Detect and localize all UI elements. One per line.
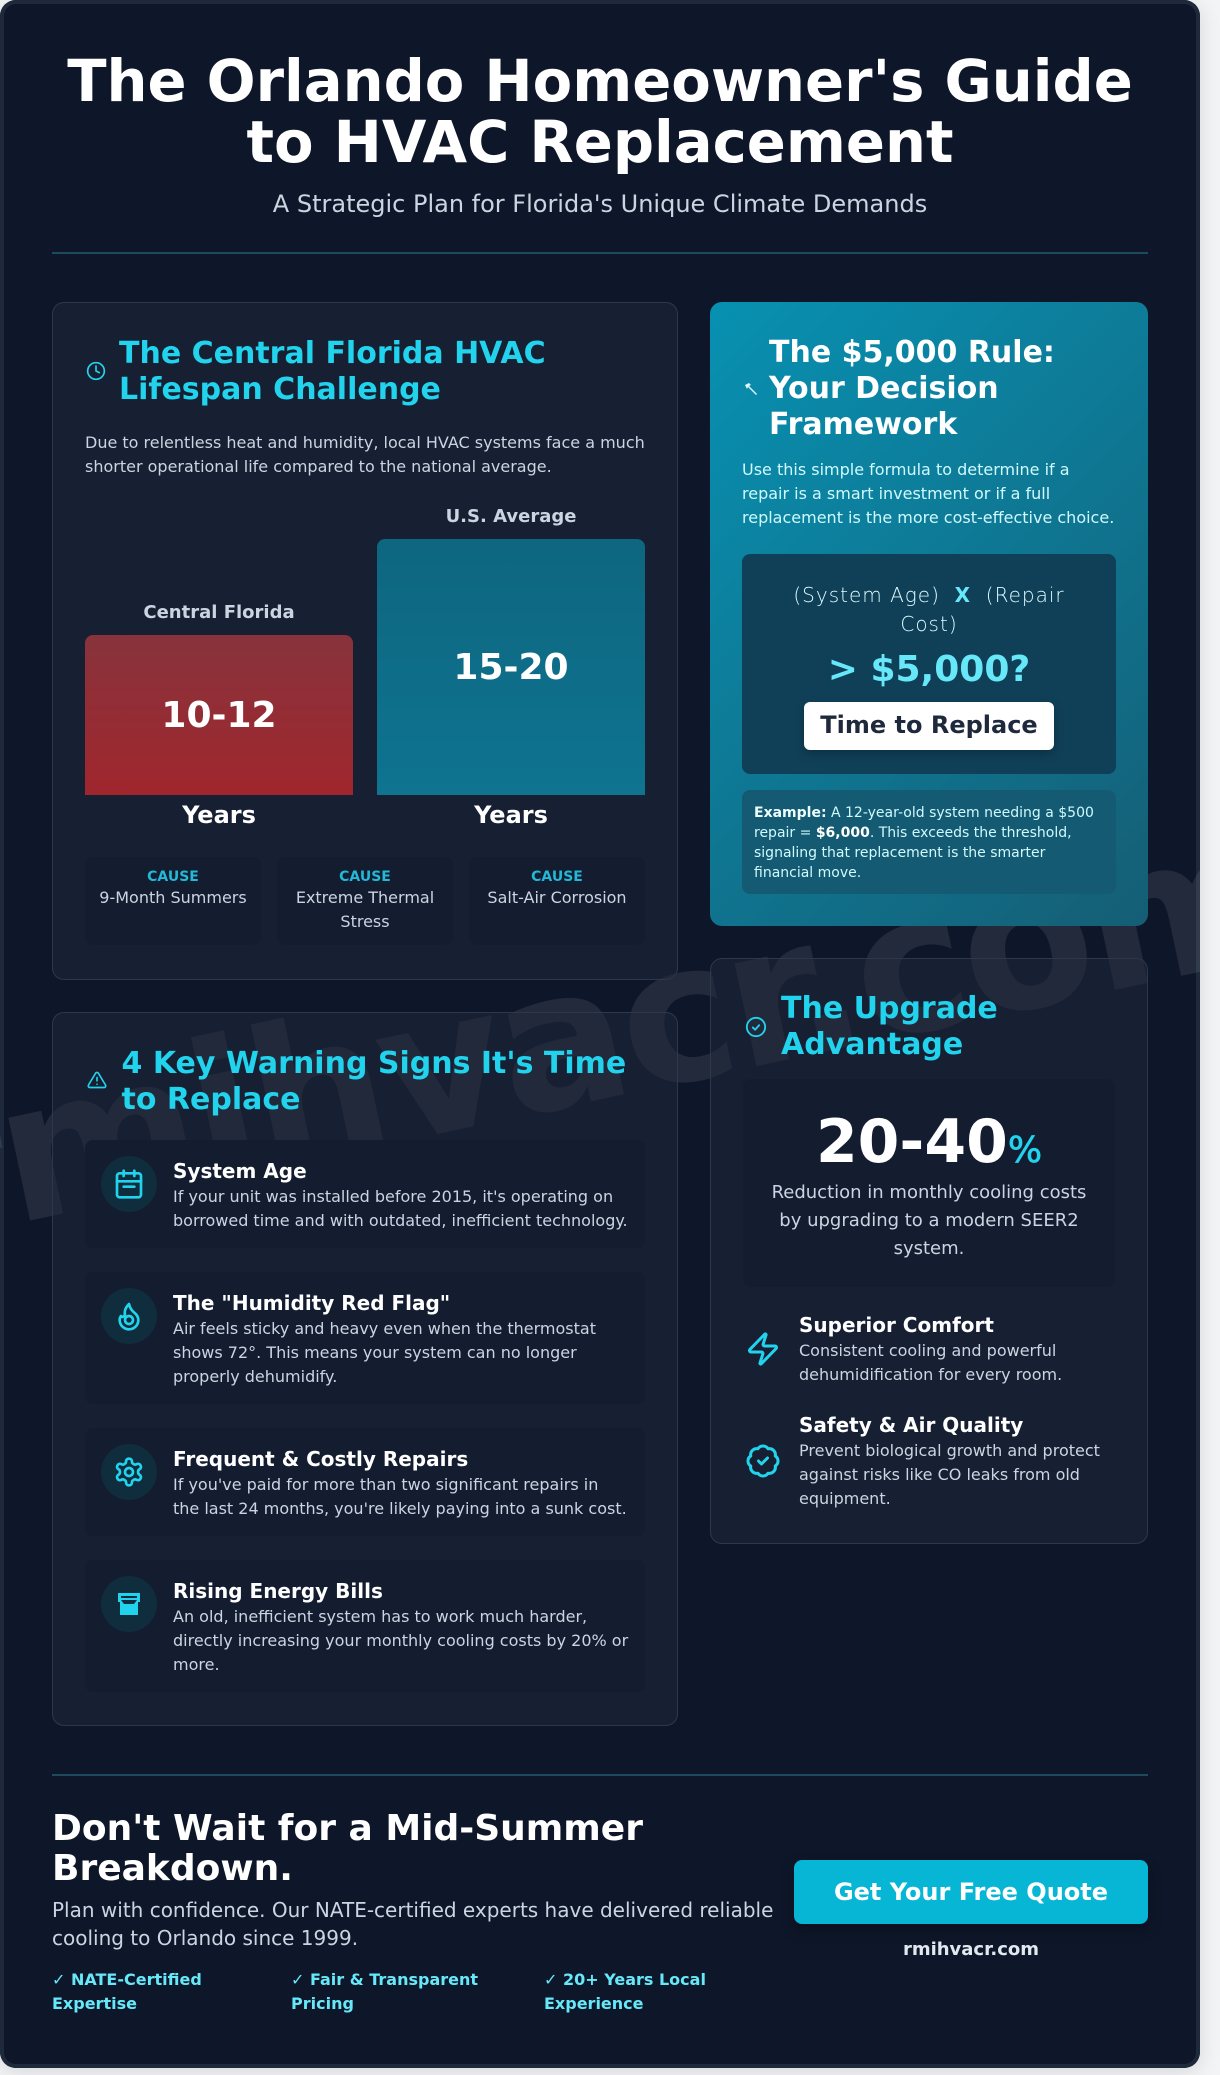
trust point: pricing: ✓ Fair & Transparent <box>291 1970 478 1988</box>
verdict pill <box>804 702 1054 750</box>
bar column: Central Florida: 10-12 <box>161 695 277 736</box>
example callout: repair = $6,000. This exceeds the threshold, <box>754 825 1072 841</box>
warning item: system age: System Age <box>173 1159 307 1183</box>
panel: lifespan challenge <box>52 302 678 980</box>
formula text: Cost) <box>900 612 958 636</box>
benefit: safety: equipment. <box>799 1489 891 1508</box>
cause: salt-air corrosion: Salt-Air Corrosion <box>487 888 627 907</box>
icon: calendar <box>101 1156 157 1212</box>
text: rule intro: repair is a smart investment or if a full <box>742 484 1050 503</box>
verdict pill: Time to Replace <box>820 711 1038 739</box>
call to action button: Get Your Free Quote <box>834 1878 1108 1906</box>
example callout: financial move. <box>754 865 861 881</box>
warning item: repairs: If you've paid for more than two significant repairs in <box>173 1475 598 1494</box>
heading: $5,000 rule: Framework <box>769 407 957 442</box>
panel: upgrade advantage <box>710 958 1148 1544</box>
text: stat caption: by upgrading to a modern SEER2 <box>779 1210 1079 1231</box>
cause: thermal stress: CAUSE <box>339 869 391 885</box>
heading: upgrade advantage: The Upgrade <box>781 991 998 1026</box>
bar column: Central Florida <box>85 602 353 829</box>
warning item: system age <box>85 1140 645 1248</box>
warning item: energy bills: Rising Energy Bills <box>173 1579 383 1603</box>
icon: warning triangle <box>87 1072 107 1088</box>
footer text: Plan with confidence. Our NATE-certified experts have delivered reliable <box>52 1898 773 1922</box>
text: rule intro: replacement is the more cost-effective choice. <box>742 508 1114 527</box>
footer heading: Don't Wait for a Mid-Summer <box>52 1808 643 1848</box>
warning item: energy bills <box>85 1560 645 1692</box>
heading: $5,000 rule: Your Decision <box>769 371 999 406</box>
example callout: Example: A 12-year-old system needing a $500 <box>754 805 1094 821</box>
cause: 9-month summers: 9-Month Summers <box>99 888 247 907</box>
call to action button <box>794 1860 1148 1924</box>
bar column: Central Florida: Years <box>182 801 256 829</box>
text: lifespan intro: Due to relentless heat and humidity, local HVAC systems face a much <box>85 433 645 452</box>
bar column: U.S. Average: 15-20 <box>453 647 569 688</box>
cause: salt-air corrosion <box>469 857 645 945</box>
benefit: safety <box>746 1413 1100 1508</box>
heading: $5,000 rule: The $5,000 Rule: <box>769 335 1055 370</box>
cause: 9-month summers: CAUSE <box>147 869 199 885</box>
benefit: superior comfort <box>748 1313 1062 1384</box>
trust point: experience: ✓ 20+ Years Local <box>544 1970 706 1988</box>
example callout <box>742 790 1116 894</box>
trust point: experience: Experience <box>544 1994 644 2012</box>
warning item: humidity: Air feels sticky and heavy even when the thermostat <box>173 1319 596 1338</box>
warning item: energy bills: directly increasing your monthly cooling costs by 20% or <box>173 1631 628 1650</box>
warning item: energy bills: more. <box>173 1655 220 1674</box>
footer heading: Breakdown. <box>52 1848 293 1888</box>
bar column: U.S. Average <box>377 506 645 829</box>
text: stat caption <box>772 1182 1086 1259</box>
benefit: safety: Prevent biological growth and protect <box>799 1441 1100 1460</box>
cause: thermal stress: Stress <box>340 912 390 931</box>
icon: check circle <box>746 1016 766 1038</box>
trust point: experience <box>544 1970 706 2012</box>
text: stat caption: system. <box>894 1238 964 1259</box>
heading: lifespan challenge: The Central Florida HVAC <box>119 336 546 371</box>
heading: upgrade advantage <box>781 991 998 1062</box>
formula text: (System Age) X (Repair <box>793 583 1065 607</box>
warning item: humidity: shows 72°. This means your system can no longer <box>173 1343 577 1362</box>
cause: thermal stress: Extreme Thermal <box>296 888 434 907</box>
subtitle: A Strategic Plan for Florida's Unique Climate Demands <box>273 190 927 218</box>
trust point: NATE: ✓ NATE-Certified <box>52 1970 202 1988</box>
panel: $5,000 rule <box>710 302 1148 926</box>
bar column: U.S. Average: Years <box>474 801 548 829</box>
icon: flame droplet <box>101 1288 157 1344</box>
bar chart: lifespan comparison <box>85 506 645 829</box>
warning item: energy bills: An old, inefficient system has to work much harder, <box>173 1607 587 1626</box>
benefit: safety: Safety & Air Quality <box>799 1413 1023 1437</box>
heading: $5,000 rule <box>768 335 1055 442</box>
warning item: humidity: The "Humidity Red Flag" <box>173 1291 450 1315</box>
text: rule intro: Use this simple formula to determine if a <box>742 460 1070 479</box>
benefit: superior comfort: Consistent cooling and powerful <box>799 1341 1056 1360</box>
heading: lifespan challenge: Lifespan Challenge <box>119 372 441 407</box>
heading: warning signs: to Replace <box>122 1082 300 1117</box>
text: stat caption: Reduction in monthly cooling costs <box>772 1182 1086 1203</box>
heading: lifespan challenge <box>119 336 546 407</box>
benefit: safety: against risks like CO leaks from old <box>799 1465 1080 1484</box>
footer text <box>52 1898 773 1950</box>
icon: box <box>101 1576 157 1632</box>
warning item: system age: borrowed time and with outdated, inefficient technology. <box>173 1211 628 1230</box>
text: lifespan intro: shorter operational life compared to the national average. <box>85 457 552 476</box>
website: rmihvacr.com <box>903 1939 1039 1960</box>
example callout: signaling that replacement is the smarter <box>754 845 1045 861</box>
warning item: repairs <box>85 1428 645 1536</box>
cause: 9-month summers <box>85 857 261 945</box>
trust point: pricing <box>291 1970 478 2012</box>
stat: 20-40%: 20-40% <box>816 1107 1042 1177</box>
stat box <box>743 1079 1115 1287</box>
title: to HVAC Replacement <box>247 108 953 176</box>
warning item: humidity <box>85 1272 645 1404</box>
bar column: Central Florida: Central Florida <box>143 602 295 623</box>
heading: warning signs <box>122 1046 626 1117</box>
title <box>67 48 1133 176</box>
icon: badge check <box>746 1444 780 1478</box>
warning item: humidity: properly dehumidify. <box>173 1367 337 1386</box>
trust point: NATE: Expertise <box>52 1994 137 2012</box>
warning item: system age: If your unit was installed before 2015, it's operating on <box>173 1187 613 1206</box>
text: rule intro <box>742 460 1114 527</box>
formula box <box>742 554 1116 774</box>
text: lifespan intro <box>85 433 645 476</box>
benefit: superior comfort: Superior Comfort <box>799 1313 994 1337</box>
bar column: U.S. Average: U.S. Average <box>446 506 576 527</box>
icon: clock <box>86 362 106 380</box>
icon: gear <box>101 1444 157 1500</box>
heading: upgrade advantage: Advantage <box>781 1027 963 1062</box>
icon: bolt <box>748 1332 778 1366</box>
formula threshold: > $5,000? <box>828 649 1030 690</box>
footer text: cooling to Orlando since 1999. <box>52 1926 358 1950</box>
title: The Orlando Homeowner's Guide <box>67 48 1133 115</box>
formula text <box>793 583 1065 636</box>
heading: warning signs: 4 Key Warning Signs It's Time <box>122 1046 626 1081</box>
cause: salt-air corrosion: CAUSE <box>531 869 583 885</box>
trust point: pricing: Pricing <box>291 1994 354 2012</box>
warning item: repairs: Frequent & Costly Repairs <box>173 1447 468 1471</box>
trust point: NATE <box>52 1970 202 2012</box>
warning item: repairs: the last 24 months, you're likely paying into a sunk cost. <box>173 1499 627 1518</box>
benefit: superior comfort: dehumidification for every room. <box>799 1365 1062 1384</box>
cause: thermal stress <box>277 857 453 945</box>
icon: tools <box>745 383 757 395</box>
footer heading <box>52 1808 643 1888</box>
panel: warning signs <box>52 1012 678 1726</box>
